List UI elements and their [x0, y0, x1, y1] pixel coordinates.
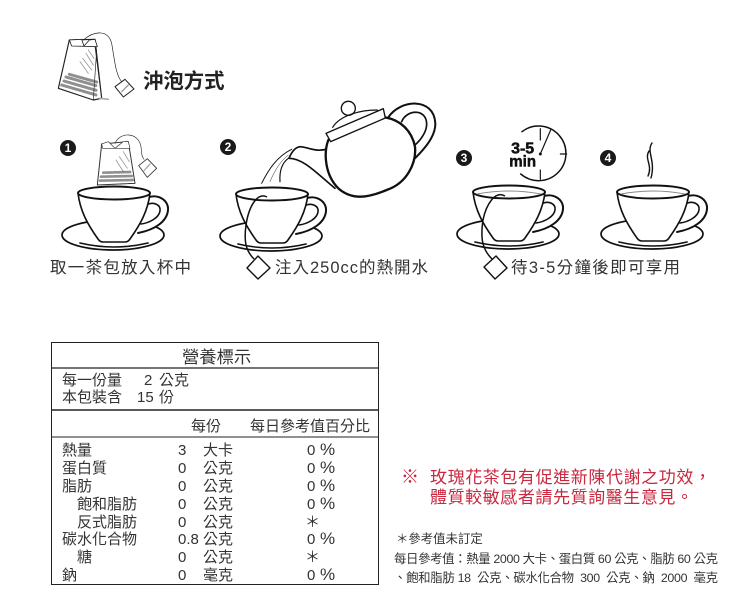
panel: nutrition table: [52, 342, 378, 584]
nutrient rows: 0: [178, 478, 186, 495]
icon: cup and saucer: [601, 186, 707, 249]
nutrient rows: 公克: [203, 514, 233, 531]
icon: steam: [647, 143, 652, 178]
nutrient rows: 0: [178, 549, 186, 566]
serving info: 15: [137, 389, 154, 406]
callout: red warning: 體質較敏感者請先質詢醫生意見。: [430, 487, 693, 507]
panel: step 2: [220, 101, 435, 279]
badge: step 1: 1: [65, 141, 72, 155]
serving info: 本包裝含: [62, 389, 122, 406]
badge: step 4: 4: [605, 151, 612, 165]
column headers: 每日參考值百分比: [250, 418, 370, 435]
badge: step 3: 3: [461, 151, 468, 165]
column headers: 每份: [191, 418, 221, 435]
nutrient rows: 公克: [203, 531, 233, 548]
heading: brewing method: 沖泡方式: [143, 69, 225, 93]
table frame: [52, 342, 378, 584]
caption: step 2: 注入250cc的熱開水: [275, 258, 428, 277]
caption: step 3: 待3-5分鐘後即可享用: [511, 258, 680, 277]
nutrient rows: ＊: [305, 514, 320, 531]
footnote: reference values: 、飽和脂肪 18 公克、碳水化合物 300 公克、鈉 2000 毫克: [394, 570, 718, 585]
nutrient rows: 公克: [203, 460, 233, 477]
caption: step 1: 取一茶包放入杯中: [50, 258, 191, 277]
icon: tea bag above cup: [97, 135, 157, 185]
nutrient rows: %: [320, 458, 335, 477]
nutrient rows: %: [320, 440, 335, 459]
nutrient rows: 0: [178, 514, 186, 531]
icon: tea bag string and tag: [245, 196, 270, 279]
serving info: 公克: [159, 372, 189, 389]
icon: timer 3-5 min: min: [509, 153, 536, 171]
serving info: 份: [159, 389, 174, 406]
column headers: [191, 418, 370, 435]
nutrient rows: [62, 440, 335, 584]
nutrient rows: 碳水化合物: [62, 531, 137, 548]
icon: tea surface and tag: [477, 191, 541, 279]
callout: red warning: [401, 467, 711, 507]
nutrient rows: 熱量: [62, 442, 92, 459]
nutrient rows: 飽和脂肪: [77, 496, 137, 513]
badge: step 2: [220, 139, 236, 155]
serving info: 2: [144, 372, 152, 389]
nutrient rows: ＊: [305, 549, 320, 566]
nutrient rows: 0: [307, 531, 315, 548]
footnote: reference values: ＊參考值未訂定: [396, 531, 483, 546]
footnote: reference values: [394, 531, 718, 585]
icon: cup and saucer: [62, 186, 168, 250]
callout: red warning: ※: [401, 467, 419, 487]
nutrient rows: 公克: [203, 478, 233, 495]
icon: timer 3-5 min: 3-5: [511, 140, 534, 157]
badge: step 2: 2: [225, 140, 232, 154]
nutrient rows: 大卡: [203, 442, 233, 459]
icon: teapot pouring: [262, 101, 435, 197]
nutrient rows: 鈉: [62, 567, 77, 584]
icon: header tea bag: [58, 33, 134, 100]
table title: 營養標示: [182, 347, 251, 367]
nutrient rows: 3: [178, 442, 186, 459]
nutrient rows: 反式脂肪: [77, 514, 137, 531]
serving info: [62, 372, 189, 406]
nutrient rows: 公克: [203, 549, 233, 566]
nutrient rows: %: [320, 529, 335, 548]
nutrient rows: 0: [307, 442, 315, 459]
icon: cup and saucer: [457, 186, 563, 249]
nutrient rows: 毫克: [203, 566, 233, 584]
nutrient rows: 0: [178, 567, 186, 584]
nutrient rows: 0: [307, 567, 315, 584]
badge: step 3: [456, 150, 472, 166]
panel: step 1: [50, 135, 191, 277]
icon: timer 3-5 min: [509, 126, 567, 181]
footnote: reference values: 每日參考值：熱量 2000 大卡、蛋白質 60 公克、脂肪 60 公克: [394, 551, 718, 566]
nutrient rows: 0: [178, 496, 186, 513]
nutrient rows: %: [320, 494, 335, 513]
nutrient rows: 0: [178, 460, 186, 477]
nutrient rows: 蛋白質: [62, 459, 107, 477]
nutrient rows: %: [320, 476, 335, 495]
nutrient rows: %: [320, 565, 335, 584]
nutrient rows: 0: [307, 460, 315, 477]
icon: tea surface: [621, 191, 685, 194]
callout: red warning: 玫瑰花茶包有促進新陳代謝之功效，: [430, 468, 711, 487]
panel: step 4: [600, 143, 707, 249]
nutrient rows: 0: [307, 496, 315, 513]
icon: cup and saucer: [220, 188, 326, 251]
panel: step 3: [456, 126, 680, 279]
nutrient rows: 糖: [77, 549, 92, 566]
nutrient rows: 公克: [203, 496, 233, 513]
nutrient rows: 0.8: [178, 531, 199, 548]
nutrient rows: 脂肪: [62, 478, 92, 495]
serving info: 每一份量: [62, 372, 122, 389]
nutrient rows: 0: [307, 478, 315, 495]
badge: step 1: [60, 140, 76, 156]
